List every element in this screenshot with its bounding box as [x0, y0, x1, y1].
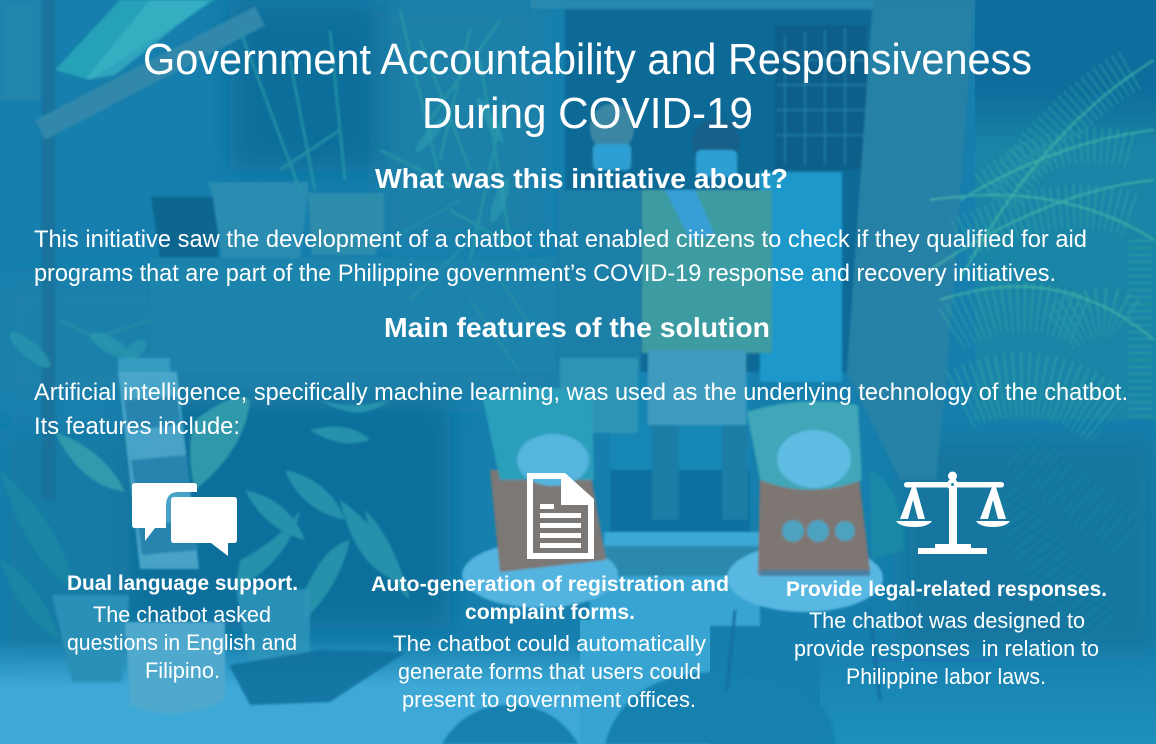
feature text: auto-generation: Auto-generation of registration and — [371, 572, 729, 596]
icon: balance scales — [896, 472, 1010, 554]
pillar — [847, 0, 975, 480]
feature text: auto-generation: present to government offices. — [402, 687, 696, 712]
paragraph: underlying technology: Its features include: — [34, 413, 240, 440]
feature text: dual language: Dual language support. — [67, 571, 298, 595]
feature text: dual language — [67, 571, 298, 683]
feature text: legal responses: The chatbot was designed to — [809, 608, 1085, 633]
paragraph: initiative description: programs that are part of the Philippine government’s COVID-19 response and recovery initiatives. — [34, 260, 1056, 287]
stools — [462, 542, 618, 608]
paragraph: underlying technology: Artificial intelligence, specifically machine learning, was used as the underlying technology of the chatbot. — [34, 379, 1128, 406]
doorway and window grille — [565, 0, 875, 372]
feature text: legal responses: Provide legal-related responses. — [786, 577, 1107, 601]
paragraph: underlying technology — [34, 379, 1128, 440]
feature text: auto-generation: complaint forms. — [465, 600, 635, 624]
heading: main features of the solution: Main features of the solution — [384, 312, 770, 343]
step wall — [150, 258, 555, 372]
feature text: legal responses — [786, 577, 1107, 689]
paragraph: initiative description: This initiative saw the development of a chatbot that enabled citizens to check if they qualified for aid — [34, 226, 1087, 253]
title: Government Accountability and Responsiveness — [143, 35, 1032, 84]
rice bag left — [490, 470, 606, 572]
paragraph: initiative description — [34, 226, 1087, 287]
trunk — [118, 372, 199, 569]
buckets and sand bags — [52, 595, 129, 682]
heading: what was this initiative about: What was this initiative about? — [375, 163, 788, 194]
plant leaves left — [55, 398, 250, 492]
rice bag right — [758, 470, 870, 575]
right palm — [950, 70, 1140, 420]
icon: document — [527, 473, 594, 559]
feature text: dual language: Filipino. — [145, 658, 220, 683]
feature text: legal responses: provide responses in relation to — [794, 636, 1099, 661]
feature: legal-related responses — [786, 472, 1107, 689]
floor shadow blobs — [442, 705, 578, 744]
feature text: dual language: questions in English and — [67, 630, 297, 655]
feature text: auto-generation: The chatbot could automatically — [393, 631, 707, 656]
feature: dual language support — [67, 483, 298, 683]
feature text: legal responses: Philippine labor laws. — [846, 664, 1046, 689]
feature text: auto-generation — [371, 572, 729, 712]
feature text: auto-generation: generate forms that users could — [398, 659, 701, 684]
steps — [604, 532, 759, 546]
title — [143, 35, 1032, 138]
feature: auto-generation of forms — [371, 473, 729, 712]
icon: chat bubbles — [132, 483, 237, 556]
title: During COVID-19 — [422, 89, 753, 138]
door panel — [760, 172, 842, 382]
women — [557, 190, 641, 372]
left frame, mesh and fern — [0, 0, 40, 100]
feature text: dual language: The chatbot asked — [93, 602, 271, 627]
foliage upper centre — [60, 10, 540, 372]
pots — [151, 197, 218, 257]
